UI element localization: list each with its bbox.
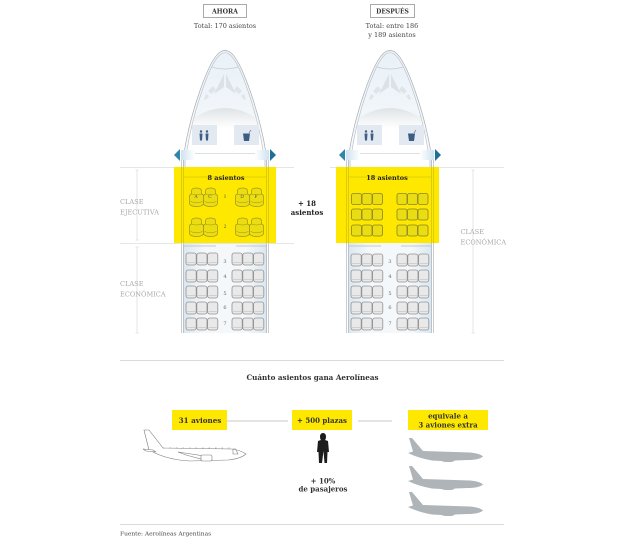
economy seats: ahora: 4	[223, 274, 227, 280]
text: 18 asientos: 18 asientos	[366, 174, 408, 182]
economy seats: ahora: 6	[223, 305, 227, 311]
business seats: D	[240, 194, 244, 200]
economy seats: ahora: 5	[223, 291, 227, 297]
connector lines	[227, 420, 392, 422]
label: clase económica después	[460, 170, 506, 333]
label: clase económica después: CLASE	[460, 228, 484, 236]
icon: grey planes	[408, 438, 483, 516]
label: clase económica ahora: CLASE	[120, 280, 144, 288]
economy seats: después: 6	[388, 305, 392, 311]
text: +18 asientos: + 18	[298, 199, 316, 208]
badge: después	[370, 4, 414, 18]
text: total después: y 189 asientos	[367, 31, 416, 39]
box: +500 plazas: + 500 plazas	[297, 416, 347, 425]
economy seats: después	[351, 254, 429, 330]
new seats	[352, 194, 428, 236]
text: +10% de pasajeros: de pasajeros	[299, 484, 348, 494]
economy seats: después: 4	[388, 274, 392, 280]
business seats: 1	[224, 194, 227, 200]
divider bottom	[120, 524, 504, 526]
plane cabin: después	[339, 50, 441, 333]
box: 31 aviones: 31 aviones	[179, 416, 221, 425]
text: total ahora: Total: 170 asientos	[194, 22, 256, 30]
source: Fuente: Aerolíneas Argentinas	[120, 530, 211, 538]
box: equivale a 3 aviones extra	[408, 410, 488, 430]
panel: después	[339, 4, 441, 333]
business seats: F	[254, 194, 258, 200]
label: clase ejecutiva	[120, 170, 159, 240]
label: clase económica ahora	[120, 247, 166, 333]
economy seats: después: 3	[388, 259, 392, 265]
economy seats: ahora: 3	[223, 259, 227, 265]
economy seats: después: 5	[388, 291, 392, 297]
label: clase ejecutiva: EJECUTIVA	[120, 208, 159, 216]
business seats	[190, 188, 264, 236]
business seats: C	[208, 194, 212, 200]
heading: Cuánto asientos gana Aerolíneas	[246, 373, 379, 382]
label: clase económica ahora: ECONÓMICA	[120, 290, 166, 298]
plane cabin: ahora	[174, 50, 276, 333]
economy seats: ahora	[186, 253, 264, 330]
economy seats: después: 7	[388, 321, 392, 327]
box: +500 plazas	[292, 410, 352, 430]
label: clase económica después: ECONÓMICA	[460, 238, 506, 246]
business seats: A	[193, 194, 198, 200]
label: clase ejecutiva: CLASE	[120, 198, 144, 206]
box: 31 aviones	[172, 410, 227, 430]
icon: outline plane	[143, 430, 246, 461]
panel: ahora	[174, 4, 276, 333]
box: equivale a 3 aviones extra: equivale a	[428, 412, 468, 420]
highlight: seats después	[336, 167, 439, 243]
divider top	[120, 360, 504, 362]
text: 8 asientos: 8 asientos	[208, 174, 245, 182]
text: total después: Total: entre 186	[366, 22, 418, 30]
box: equivale a 3 aviones extra: 3 aviones extra	[418, 420, 478, 430]
badge: después: DESPUÉS	[376, 8, 409, 16]
business seats: 2	[224, 224, 227, 230]
icon: person	[317, 433, 329, 463]
badge: ahora	[204, 4, 246, 18]
divider lines	[120, 168, 504, 244]
highlight: business ahora	[174, 167, 276, 243]
text: +18 asientos: asientos	[291, 208, 323, 217]
text: +10% de pasajeros: + 10%	[311, 476, 336, 486]
economy seats: ahora: 7	[223, 321, 227, 327]
badge: ahora: AHORA	[211, 8, 238, 16]
